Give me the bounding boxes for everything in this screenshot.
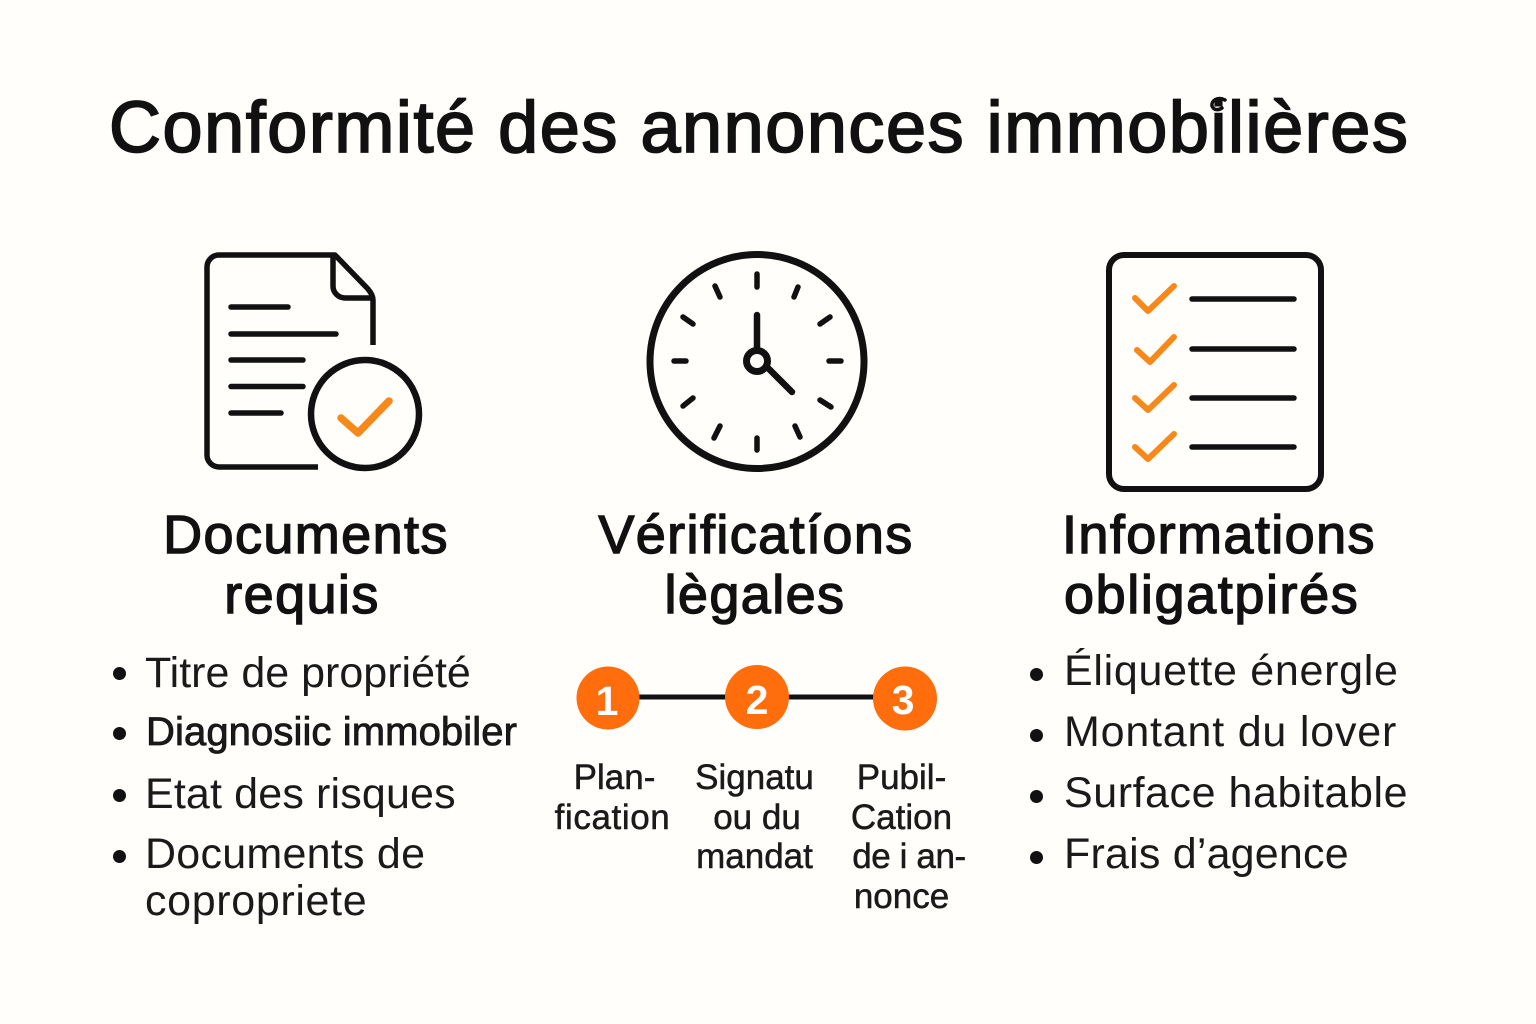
timeline: three steps: 2 — [746, 677, 768, 723]
heading: informations obligatoires: obligatpirés — [1064, 565, 1359, 625]
timeline: three steps — [576, 665, 937, 730]
heading: informations obligatoires: Informations — [1062, 505, 1376, 565]
list: documents: Documents de — [145, 830, 425, 878]
list: informations: Éliquette énergle — [1064, 647, 1399, 695]
heading: documents requis: requis — [224, 565, 380, 625]
list: informations: Frais d’agence — [1064, 830, 1349, 878]
step 2 label: ou du — [713, 798, 801, 836]
timeline: three steps: 1 — [596, 678, 618, 724]
heading: vérifications légales — [598, 505, 914, 625]
step 2 label — [695, 758, 814, 876]
list: documents: Etat des risques — [145, 770, 456, 818]
step 3 label: Cation — [851, 798, 952, 836]
panel: documents requis — [113, 252, 517, 925]
list: documents: Diagnosiic immobiler — [146, 710, 517, 754]
step 1 label — [554, 758, 670, 836]
heading: vérifications légales: lègales — [665, 565, 845, 625]
list: informations — [1030, 647, 1408, 878]
step 3 label: nonce — [854, 876, 949, 916]
panel: vérifications légales — [554, 251, 966, 916]
panel: informations obligatoires — [1030, 252, 1408, 878]
list: informations: Surface habitable — [1064, 769, 1408, 817]
heading: documents requis: Documents — [163, 505, 449, 565]
heading: vérifications légales: Vérificatíons — [598, 505, 914, 565]
icon: checklist — [1106, 252, 1324, 492]
icon: clock — [646, 251, 868, 472]
step 2 label: Signatu — [695, 758, 814, 797]
list: documents — [113, 649, 517, 925]
heading: documents requis — [163, 505, 449, 625]
list: documents: Titre de propriété — [145, 649, 471, 697]
timeline: three steps: 3 — [892, 677, 914, 723]
step 3 label — [851, 758, 966, 916]
list: informations: Montant du lover — [1064, 708, 1397, 756]
step 1 label: Plan- — [574, 758, 655, 797]
step 3 label: Pubil- — [857, 758, 946, 797]
step 3 label: de i an- — [852, 837, 966, 876]
step 2 label: mandat — [696, 837, 813, 876]
icon: document with check — [204, 252, 422, 472]
step 1 label: fication — [555, 798, 670, 836]
title: Conformité des annonces immobilières — [109, 88, 1409, 168]
heading: informations obligatoires — [1062, 505, 1376, 625]
list: documents: copropriete — [145, 877, 367, 925]
